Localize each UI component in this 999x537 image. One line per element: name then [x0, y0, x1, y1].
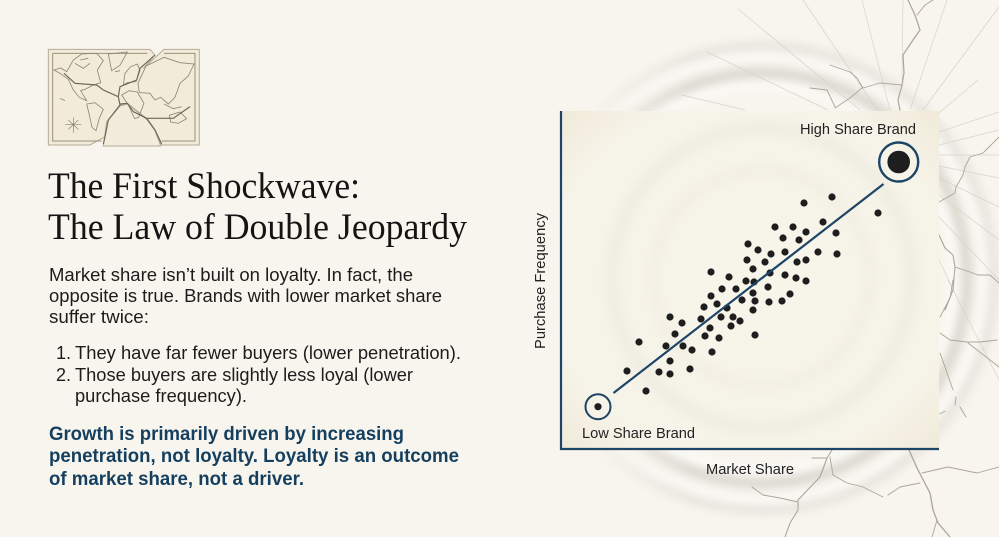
numbered list: 2. — [56, 365, 71, 385]
trend line — [614, 184, 884, 393]
radiating fracture lines — [682, 0, 999, 380]
intro paragraph: Market share isn’t built on loyalty. In fact, the — [49, 265, 413, 285]
low share brand marker — [586, 394, 610, 419]
scatter dots — [623, 193, 882, 395]
numbered list: Those buyers are slightly less loyal (lower — [75, 365, 413, 385]
intro paragraph: suffer twice: — [49, 307, 149, 327]
high share brand marker — [879, 142, 918, 182]
x axis label: Market Share — [706, 461, 794, 478]
numbered list — [56, 343, 461, 406]
key takeaway: penetration, not loyalty. Loyalty is an outcome — [49, 446, 459, 467]
numbered list: purchase frequency). — [75, 386, 247, 406]
title: The Law of Double Jeopardy — [48, 207, 467, 248]
intro paragraph — [49, 265, 442, 327]
icon: cracked world map — [48, 49, 199, 146]
numbered list: 1. — [56, 343, 71, 363]
title: The First Shockwave: — [48, 166, 360, 207]
y axis label: Purchase Frequency — [532, 213, 549, 349]
cracks — [752, 0, 999, 537]
chart axes — [561, 111, 939, 449]
title — [48, 166, 467, 248]
chart panel — [561, 111, 939, 449]
intro paragraph: opposite is true. Brands with lower market share — [49, 286, 442, 306]
label: low share brand: Low Share Brand — [582, 425, 695, 442]
numbered list: They have far fewer buyers (lower penetration). — [75, 343, 461, 363]
key takeaway: of market share, not a driver. — [49, 469, 304, 490]
key takeaway: Growth is primarily driven by increasing — [49, 424, 404, 445]
label: high share brand: High Share Brand — [800, 121, 916, 138]
key takeaway — [49, 424, 459, 490]
shockwave ripple rings — [635, 41, 999, 515]
